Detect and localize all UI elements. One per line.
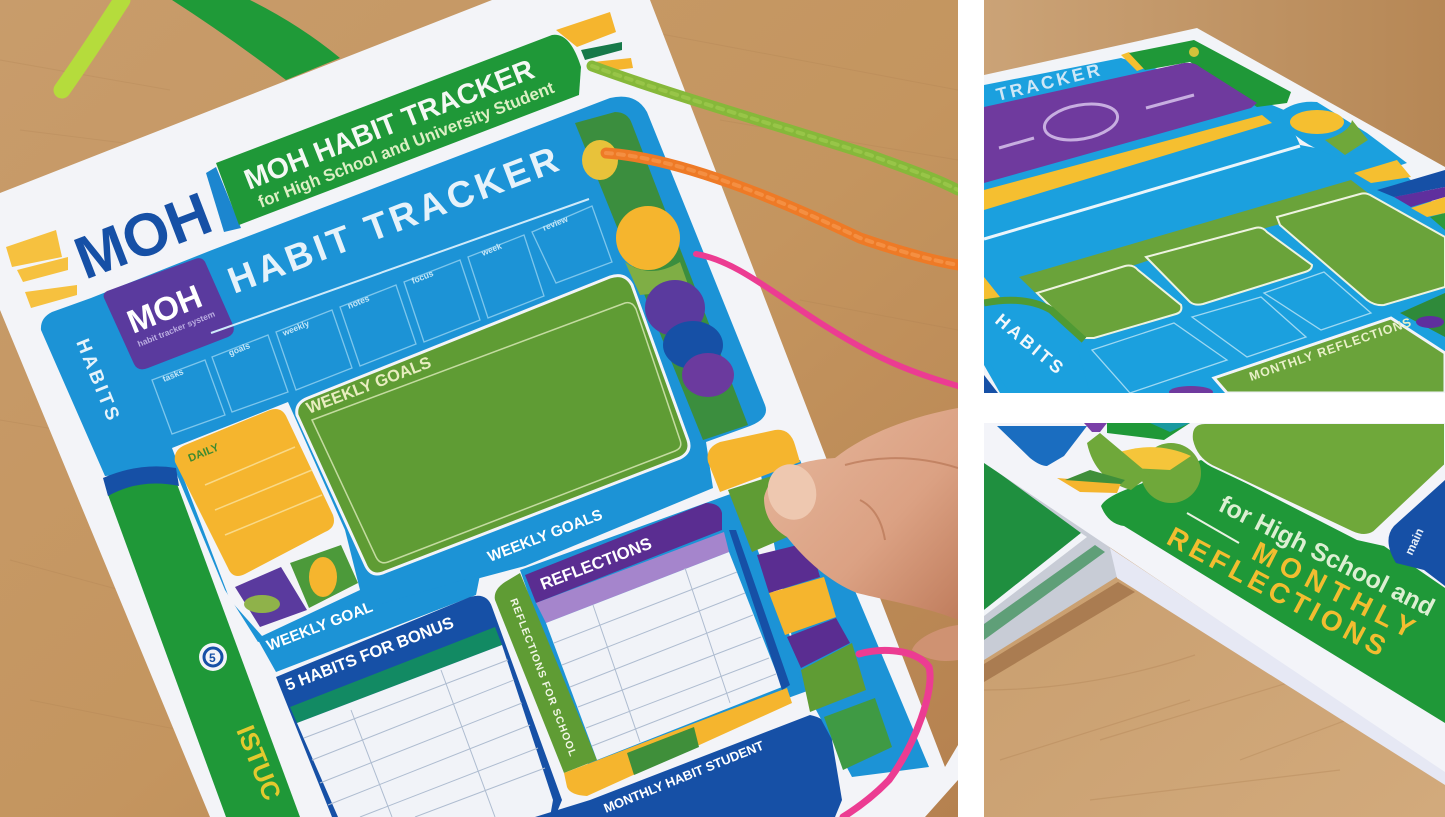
white area behind cards <box>172 402 360 636</box>
blue corner tab: main <box>1402 526 1427 557</box>
divider line <box>1187 513 1239 543</box>
green card 1 <box>1037 266 1181 338</box>
yarn: pink lower <box>843 650 930 817</box>
bottom right table: REFLECTIONS <box>538 534 654 594</box>
top purple and green tabs <box>1084 423 1190 440</box>
tagline: for High School and <box>1214 490 1439 622</box>
left label: vertical HABITS: HABITS <box>71 336 124 426</box>
header banner <box>206 35 581 232</box>
navy corner <box>984 375 998 393</box>
cell captions: notes <box>346 293 371 311</box>
table shadow <box>984 582 1135 682</box>
monthly text: MONTHLY <box>1247 536 1426 647</box>
bottom right table: REFLECTIONS FOR SCHOOL <box>507 597 579 759</box>
corner accent stripes <box>556 12 633 72</box>
yarn: pink <box>696 254 958 386</box>
yarn: lime tassel <box>62 0 122 90</box>
decorative fruit icon <box>1057 433 1201 503</box>
sheet <box>984 28 1445 393</box>
left vertical label <box>984 303 1090 393</box>
blue corner tab <box>1388 480 1445 586</box>
purple badge: habit tracker system <box>136 308 217 349</box>
corner icon <box>1400 293 1445 337</box>
panel: main tracker photo <box>0 0 958 817</box>
green sidebar: ISTUC <box>230 721 288 805</box>
purple badge <box>104 258 234 369</box>
main sheet <box>984 423 1445 772</box>
cell captions: review <box>541 214 570 233</box>
cell captions: tasks <box>161 366 185 384</box>
ribbon: green <box>172 0 340 80</box>
yellow left blip <box>984 277 1000 302</box>
logo mark: yellow bars <box>6 230 77 308</box>
logo text MOH: MOH <box>66 179 220 292</box>
cell captions <box>161 214 570 384</box>
purple badge: MOH <box>122 277 207 340</box>
header subtitle: for High School and University Student <box>256 78 557 212</box>
bottom navy band: MONTHLY HABIT STUDENT <box>602 738 766 816</box>
right colour column <box>575 112 748 440</box>
second sheet edge <box>1110 548 1445 785</box>
hand <box>762 408 958 661</box>
weekly goals label: WEEKLY GOALS <box>485 506 605 566</box>
green sidebar <box>103 466 300 817</box>
green top band <box>1129 40 1291 107</box>
yellow bar <box>984 115 1272 210</box>
bottom left table <box>276 596 562 817</box>
cell captions: week <box>479 241 503 258</box>
green sidebar: 5 <box>209 651 216 665</box>
reflections strip: MONTHLY REFLECTIONS <box>1247 315 1414 384</box>
paper sheet <box>0 0 958 817</box>
top grid row <box>152 199 612 434</box>
top blue shape <box>997 426 1087 466</box>
weekly goal pill <box>258 575 480 672</box>
white divider <box>984 146 1300 239</box>
weekly goals green card: WEEKLY GOALS <box>304 354 434 418</box>
weekly goal pill: WEEKLY GOAL <box>264 599 375 655</box>
cell captions: goals <box>227 340 252 358</box>
bottom left table: 5 HABITS FOR BONUS <box>283 614 456 695</box>
yellow daily card <box>175 409 334 576</box>
yarn strand <box>984 300 1084 340</box>
bottom right table <box>495 492 810 796</box>
cell row <box>1092 272 1371 393</box>
circle badge <box>1279 102 1407 172</box>
title: habit tracker: HABIT TRACKER <box>222 138 567 301</box>
lower booklet <box>984 455 1134 660</box>
panel: bottom right detail photo <box>984 423 1445 817</box>
reflections text: REFLECTIONS <box>1162 521 1395 664</box>
top label: TRACKER <box>994 59 1105 105</box>
blue base <box>984 58 1445 393</box>
reflections strip <box>1214 315 1445 393</box>
header title: MOH HABIT TRACKER <box>240 54 539 197</box>
left vertical label: HABITS <box>991 310 1069 380</box>
small icon tiles <box>235 545 358 627</box>
weekly goals green card <box>297 276 689 574</box>
cell captions: focus <box>410 268 435 286</box>
right lower colour strip <box>708 430 929 777</box>
panel: top right detail photo <box>984 0 1445 398</box>
purple header card <box>984 63 1257 183</box>
yellow daily card: DAILY <box>187 441 221 465</box>
yellow tab <box>1121 52 1145 71</box>
green card 2 <box>1146 228 1312 305</box>
cell captions: weekly <box>280 318 311 338</box>
bottom navy band <box>535 715 842 817</box>
green tagline band <box>1101 460 1445 723</box>
yarn: green <box>592 66 958 190</box>
blue main panel <box>41 97 766 642</box>
green card top <box>1192 423 1445 535</box>
accent stripes <box>1354 160 1445 230</box>
yarn: orange <box>606 153 958 265</box>
lower purple blip <box>1169 386 1213 398</box>
green frame <box>1019 180 1372 340</box>
green card 3 <box>1277 193 1445 305</box>
